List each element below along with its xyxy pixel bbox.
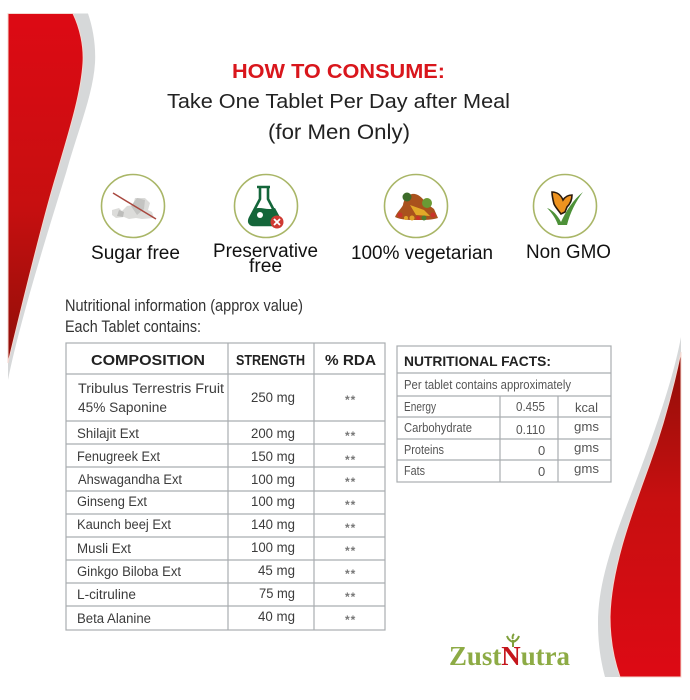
- row: Beta Alanine: [77, 609, 356, 627]
- row: Beta Alanine: 40 mg: [258, 609, 295, 624]
- row: Ginkgo: **: [345, 567, 356, 581]
- row: L-citruline: [77, 586, 356, 604]
- row: Ginseng: 100 mg: [251, 494, 295, 509]
- row: proteins: [404, 440, 600, 458]
- table grid: [66, 343, 385, 630]
- row: Tribulus: [78, 381, 356, 415]
- text: nutritional information: Each Tablet contains:: [65, 318, 201, 336]
- nutritional facts table: [397, 346, 611, 482]
- label: sugar free: Sugar free: [91, 243, 180, 264]
- subtitle: audience: (for Men Only): [268, 121, 410, 144]
- label: preservative free: free: [249, 256, 282, 277]
- icon: preservative free: [234, 174, 298, 238]
- row: Ginkgo: [77, 563, 356, 581]
- table header: STRENGTH: [236, 352, 305, 369]
- row: Ahswagandha: Ahswagandha Ext: [78, 472, 182, 487]
- title: HOW TO CONSUME:: [232, 61, 445, 83]
- label: preservative free: [213, 241, 318, 277]
- row: Ahswagandha: 100 mg: [251, 472, 295, 487]
- row: energy: 0.455: [516, 399, 545, 414]
- row: Shilajit: 200 mg: [251, 426, 295, 441]
- subtitle: dosage: Take One Tablet Per Day after Meal: [167, 90, 510, 113]
- row: Tribulus: Tribulus Terrestris Fruit: [78, 381, 224, 396]
- decorative swoosh: top left: [8, 14, 95, 380]
- row: Fenugreek: **: [345, 453, 356, 467]
- row: Kaunch beej: [77, 517, 356, 535]
- row: Beta Alanine: **: [345, 613, 356, 627]
- row: Kaunch beej: **: [345, 521, 356, 535]
- table header: [91, 352, 376, 369]
- row: fats: gms: [574, 461, 600, 476]
- decorative swoosh: bottom right: [598, 337, 681, 677]
- row: proteins: gms: [574, 440, 600, 455]
- row: proteins: 0: [538, 443, 545, 458]
- row: Fenugreek: 150 mg: [251, 449, 295, 464]
- facts subheading: Per tablet contains approximately: [404, 377, 571, 392]
- row: fats: 0: [538, 464, 545, 479]
- row: carbohydrate: gms: [574, 419, 600, 434]
- row: Shilajit: **: [345, 429, 356, 443]
- row: proteins: Proteins: [404, 442, 444, 457]
- table header: COMPOSITION: [91, 352, 205, 369]
- row: L-citruline: **: [345, 590, 356, 604]
- row: energy: [404, 399, 598, 415]
- row: Kaunch beej: Kaunch beej Ext: [77, 517, 171, 532]
- row: Musli: **: [345, 544, 356, 558]
- logo: ZustNutra: ZustNutra: [449, 641, 570, 671]
- row: Shilajit: Shilajit Ext: [77, 426, 139, 441]
- row: Tribulus: **: [345, 393, 356, 407]
- row: Fenugreek: [77, 449, 356, 467]
- row: Tribulus: 250 mg: [251, 390, 295, 405]
- label: preservative free: Preservative: [213, 241, 318, 262]
- row: Ahswagandha: **: [345, 475, 356, 489]
- icon: non GMO: [534, 174, 596, 238]
- row: Beta Alanine: Beta Alanine: [77, 611, 151, 626]
- row: Ahswagandha: [78, 472, 356, 489]
- row: carbohydrate: 0.110: [516, 422, 545, 437]
- row: carbohydrate: Carbohydrate: [404, 420, 472, 435]
- icon: sugar free: [102, 174, 164, 238]
- icon: 100% vegetarian: [384, 174, 448, 238]
- row: Fenugreek: Fenugreek Ext: [77, 449, 160, 464]
- row: Kaunch beej: 140 mg: [251, 517, 295, 532]
- row: Musli: [77, 540, 356, 558]
- facts grid: [397, 346, 611, 482]
- row: Tribulus: 45% Saponine: [78, 400, 167, 415]
- row: Ginkgo: 45 mg: [258, 563, 295, 578]
- text: nutritional information: [65, 297, 303, 336]
- row: Musli: 100 mg: [251, 540, 295, 555]
- row: energy: Energy: [404, 399, 436, 414]
- label: 100% vegetarian: 100% vegetarian: [351, 243, 493, 264]
- facts heading: NUTRITIONAL FACTS:: [404, 353, 551, 369]
- row: Ginseng: [77, 494, 356, 512]
- row: Ginseng: **: [345, 498, 356, 512]
- row: Ginseng: Ginseng Ext: [77, 494, 147, 509]
- row: energy: kcal: [575, 400, 598, 415]
- row: Ginkgo: Ginkgo Biloba Ext: [77, 564, 181, 579]
- label: non GMO: Non GMO: [526, 242, 611, 263]
- row: fats: [404, 461, 600, 479]
- table header: % RDA: [325, 352, 376, 369]
- row: Shilajit: [77, 426, 356, 443]
- row: fats: Fats: [404, 463, 425, 478]
- row: L-citruline: 75 mg: [259, 586, 295, 601]
- composition table: [66, 343, 385, 630]
- text: nutritional information: Nutritional information (approx value): [65, 297, 303, 315]
- row: carbohydrate: [404, 419, 600, 437]
- row: L-citruline: L-citruline: [77, 587, 136, 602]
- row: Musli: Musli Ext: [77, 541, 131, 556]
